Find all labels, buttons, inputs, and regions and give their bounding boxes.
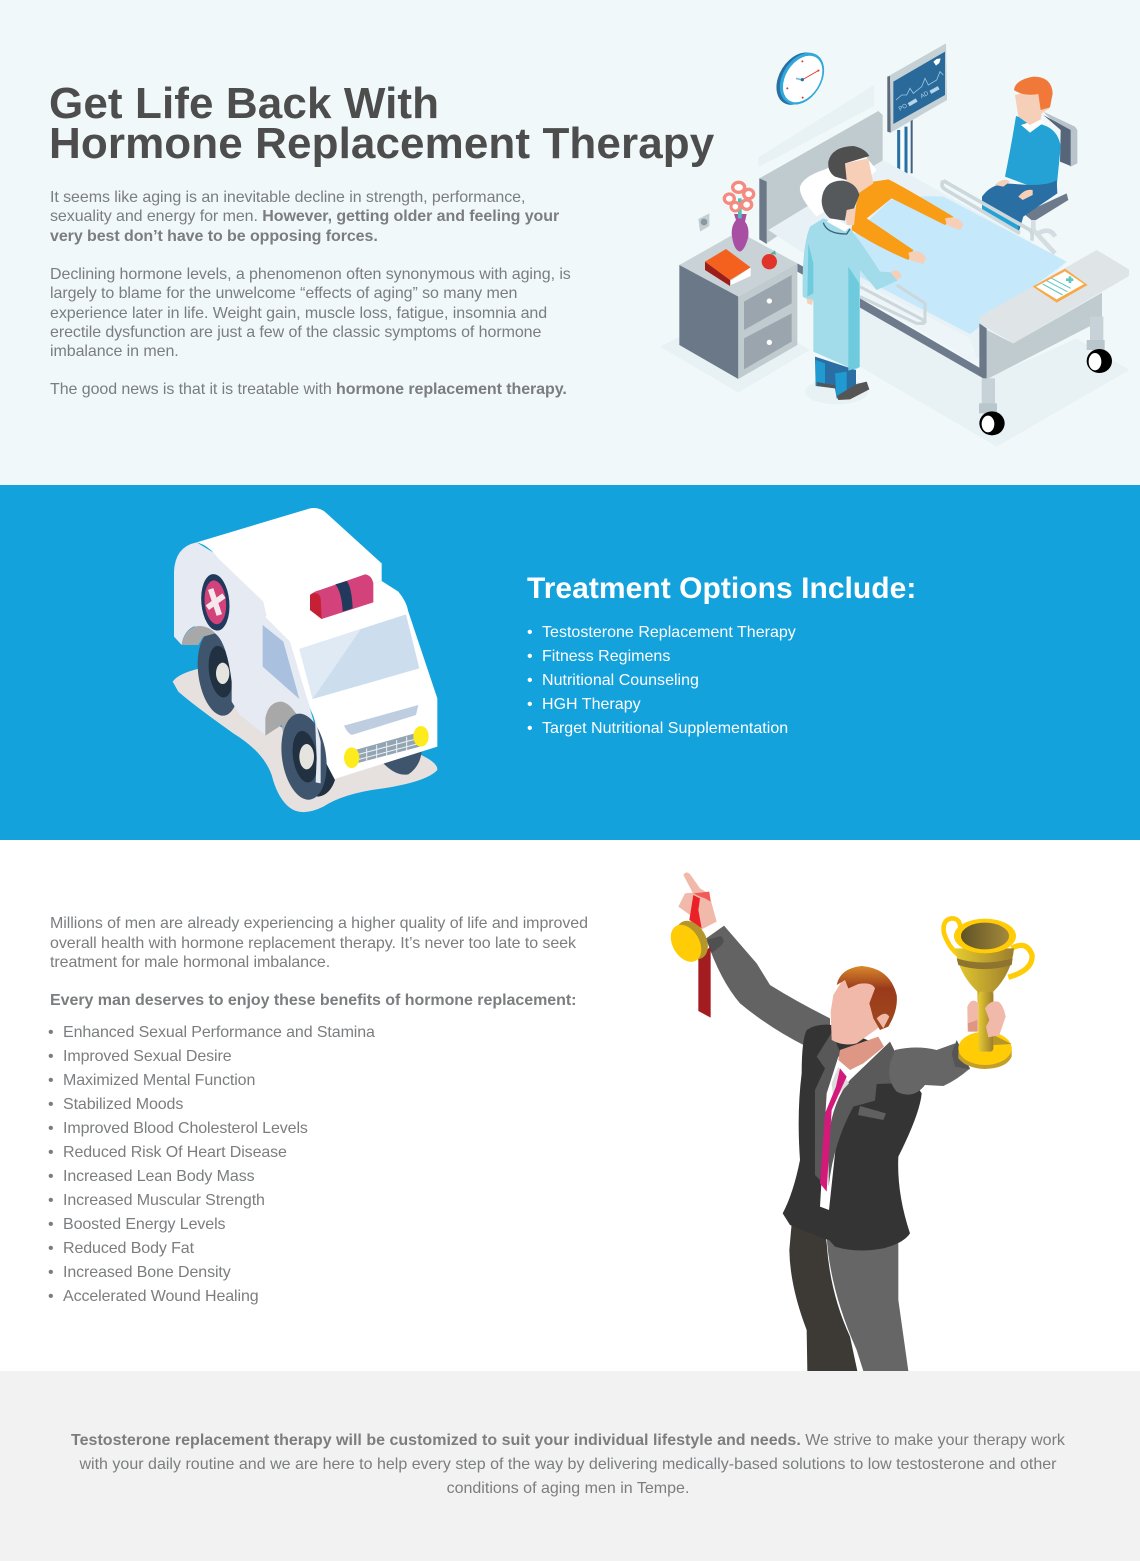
list: treatment options: Fitness Regimens <box>542 648 670 665</box>
list: benefits: • <box>48 1192 54 1209</box>
side window <box>263 625 299 699</box>
title: Hormone Replacement Therapy <box>49 119 714 168</box>
text block: intro paragraph two: erectile dysfunction are just a few of the classic symptoms of hormone <box>50 324 541 341</box>
panel: treatment options background <box>0 485 1140 840</box>
icon: heart monitor: PO <box>898 103 909 113</box>
headlights <box>344 747 359 768</box>
text block: benefits introduction: treatment for male hormonal imbalance. <box>50 954 330 971</box>
icon: heart monitor: AD <box>920 90 930 100</box>
text block: intro paragraph two: imbalance in men. <box>50 343 179 360</box>
icon: heart monitor <box>887 43 947 184</box>
list: treatment options: • <box>527 624 533 641</box>
list: benefits <box>48 1024 375 1305</box>
text block: intro paragraph one <box>50 189 559 245</box>
title <box>49 79 714 168</box>
illustration: ambulance <box>172 508 438 812</box>
bed legs and wheels <box>979 317 1112 435</box>
subheading: benefits: Every man deserves to enjoy these benefits of hormone replacement: <box>50 992 576 1009</box>
wall socket <box>698 213 709 232</box>
figure: doctor <box>803 181 902 400</box>
list: benefits: Accelerated Wound Healing <box>63 1288 259 1305</box>
medal hand and ribbon <box>664 872 717 1018</box>
list: benefits: Enhanced Sexual Performance and Stamina <box>63 1024 375 1041</box>
text block: intro paragraph one: It seems like aging is an inevitable decline in strength, performance, <box>50 189 525 206</box>
hood vent <box>344 705 418 735</box>
list: benefits: Increased Muscular Strength <box>63 1192 265 1209</box>
rear wheel <box>193 628 244 718</box>
list: benefits: Improved Sexual Desire <box>63 1048 232 1065</box>
list: benefits: Increased Bone Density <box>63 1264 231 1281</box>
legs <box>789 1223 908 1371</box>
book <box>705 249 751 280</box>
heading: treatment options: Treatment Options Include: <box>527 572 916 605</box>
text block: closing statement: with your daily routine and we are here to help every step of the way by delivering medically-based solutions to low testosterone and other <box>79 1456 1057 1473</box>
wheel arch <box>182 626 215 645</box>
panel: intro background <box>0 0 1140 485</box>
vase <box>732 214 749 252</box>
roof <box>197 508 382 617</box>
raised arm <box>702 920 830 1047</box>
text block: benefits introduction <box>50 915 588 971</box>
jacket <box>783 1025 922 1250</box>
siren light <box>310 574 373 619</box>
list: benefits: Increased Lean Body Mass <box>63 1168 254 1185</box>
bed rail near side <box>860 285 925 323</box>
figure: visitor on chair <box>982 77 1077 253</box>
illustration: businessman with medal and trophy <box>670 872 1035 1371</box>
cab <box>265 581 437 783</box>
text block: benefits introduction: Millions of men are already experiencing a higher quality of life and improved <box>50 915 588 932</box>
list: benefits: Reduced Risk Of Heart Disease <box>63 1144 287 1161</box>
text block: closing statement <box>71 1432 1065 1497</box>
list: benefits: • <box>48 1288 54 1305</box>
list: benefits: • <box>48 1240 54 1257</box>
apple <box>762 254 777 269</box>
list: benefits: Boosted Energy Levels <box>63 1216 225 1233</box>
list: benefits: • <box>48 1168 54 1185</box>
head <box>831 966 897 1070</box>
text block: closing statement: Testosterone replacement therapy will be customized to suit your individual lifestyle and needs. We strive to make your therapy work <box>71 1432 1065 1449</box>
list: benefits: Reduced Body Fat <box>63 1240 194 1257</box>
icon: bed <box>759 111 1129 435</box>
list: benefits: • <box>48 1216 54 1233</box>
front far wheel <box>383 752 422 775</box>
front wheel <box>276 711 335 803</box>
list: benefits: • <box>48 1144 54 1161</box>
text block: intro paragraph two: largely to blame for the unwelcome “effects of aging” so many men <box>50 285 517 302</box>
list: benefits: • <box>48 1024 54 1041</box>
panel: closing statement background <box>0 1371 1140 1561</box>
icon: wall clock <box>767 44 833 113</box>
icon: trophy <box>944 918 1032 1069</box>
list: benefits: Stabilized Moods <box>63 1096 183 1113</box>
text block: intro paragraph one: very best don’t have to be opposing forces. <box>50 228 378 245</box>
text block: benefits introduction: overall health with hormone replacement therapy. It’s never too late to seek <box>50 935 576 952</box>
list: treatment options: • <box>527 672 533 689</box>
text block: closing statement: conditions of aging men in Tempe. <box>447 1480 689 1497</box>
text block: intro paragraph two: Declining hormone levels, a phenomenon often synonymous with aging, is <box>50 266 571 283</box>
list: benefits: • <box>48 1048 54 1065</box>
text block: intro paragraph two: experience later in life. Weight gain, muscle loss, fatigue, insomnia and <box>50 305 547 322</box>
list: benefits: Maximized Mental Function <box>63 1072 255 1089</box>
icon: medical cross badge <box>199 573 232 632</box>
text block: intro paragraph two <box>50 266 571 360</box>
list: benefits: • <box>48 1096 54 1113</box>
list: benefits: • <box>48 1072 54 1089</box>
illustration: hospital room <box>679 44 1129 436</box>
icon: nightstand with book, vase and apple <box>679 182 797 379</box>
title: Get Life Back With <box>49 79 439 128</box>
figure: patient in bed <box>828 146 963 264</box>
list: treatment options: Testosterone Replacement Therapy <box>542 624 796 641</box>
list: benefits: Improved Blood Cholesterol Levels <box>63 1120 308 1137</box>
list: benefits: • <box>48 1264 54 1281</box>
list: treatment options <box>527 624 796 737</box>
list: treatment options: • <box>527 720 533 737</box>
list: treatment options: • <box>527 696 533 713</box>
bed rail far side <box>942 181 1032 241</box>
grille <box>355 732 420 763</box>
list: treatment options: Nutritional Counseling <box>542 672 699 689</box>
text block: intro paragraph one: sexuality and energy for men. However, getting older and feeling your <box>50 208 559 225</box>
text block: intro paragraph three: The good news is that it is treatable with hormone replacement therapy. <box>50 381 567 398</box>
ambulance body side <box>174 542 321 783</box>
windshield <box>299 614 419 699</box>
ground shadow <box>173 668 437 812</box>
list: treatment options: Target Nutritional Supplementation <box>542 720 788 737</box>
other arm <box>889 1040 970 1095</box>
list: treatment options: • <box>527 648 533 665</box>
icon: clipboard <box>1033 269 1088 303</box>
list: treatment options: HGH Therapy <box>542 696 641 713</box>
list: benefits: • <box>48 1120 54 1137</box>
